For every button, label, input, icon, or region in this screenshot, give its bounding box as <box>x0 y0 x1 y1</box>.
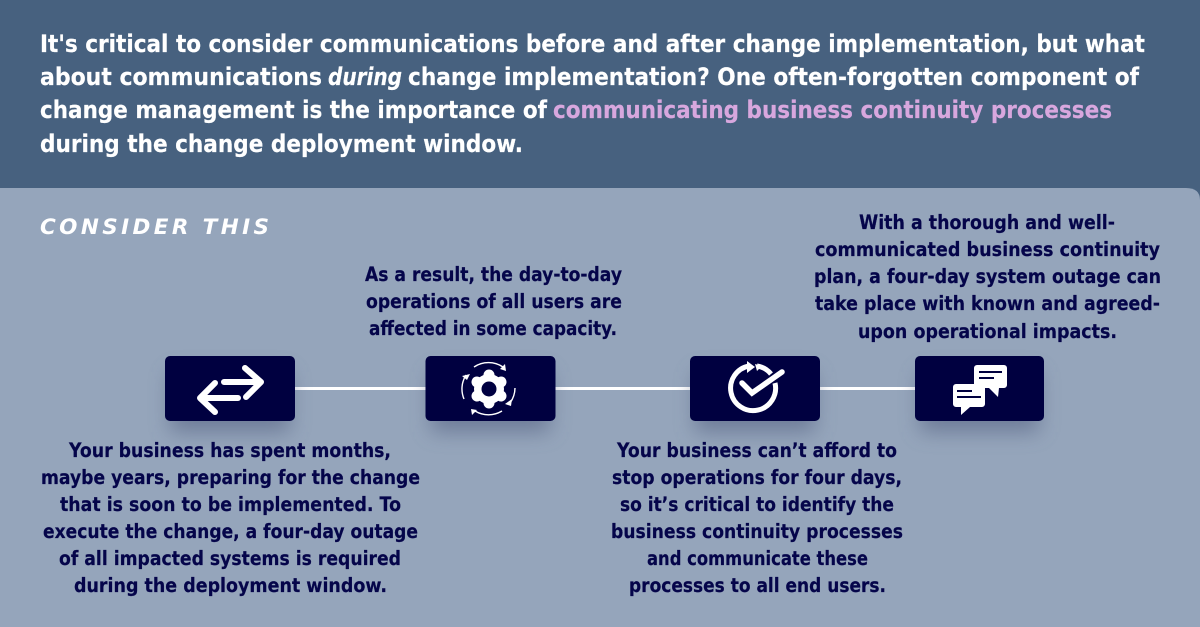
step 3 icon box: check cycle <box>690 356 820 432</box>
step 1 text <box>41 439 420 597</box>
intro paragraph: change management is the importance of <box>40 96 547 124</box>
step 1 text: execute the change, a four-day outage <box>43 520 418 543</box>
step 3 text: and communicate these <box>647 547 868 570</box>
step 1 text: of all impacted systems is required <box>59 547 401 570</box>
step 2 text: operations of all users are <box>366 290 622 313</box>
step 4 text: plan, a four-day system outage can <box>814 265 1161 288</box>
step 3 text: business continuity processes <box>611 520 903 543</box>
timeline connector <box>290 387 920 390</box>
step 1 text: during the deployment window. <box>74 574 387 597</box>
step 2 text: affected in some capacity. <box>369 317 617 340</box>
step 2 icon box: gear cycle <box>426 356 556 432</box>
step 4 text: upon operational impacts. <box>858 320 1117 343</box>
panel: consider this <box>0 188 1200 627</box>
step 1 text: Your business has spent months, <box>68 439 391 462</box>
step 4 icon box: chat bubbles <box>915 356 1044 432</box>
step 3 text <box>611 439 903 597</box>
step 3 text: so it’s critical to identify the <box>620 493 894 516</box>
intro paragraph: during <box>328 63 402 91</box>
step 4 text: With a thorough and well- <box>859 211 1115 234</box>
step 2 text: As a result, the day-to-day <box>365 263 622 286</box>
intro paragraph <box>40 30 1145 158</box>
step 4 text <box>814 211 1161 343</box>
step 1 icon box: arrows <box>165 356 295 432</box>
intro paragraph: communicating business continuity processes <box>553 96 1112 124</box>
intro paragraph: change implementation? One often-forgotten component of <box>408 63 1139 91</box>
step 3 text: processes to all end users. <box>629 574 886 597</box>
step 4 text: take place with known and agreed- <box>815 292 1160 315</box>
intro paragraph: during the change deployment window. <box>40 130 523 158</box>
step 1 text: that is soon to be implemented. To <box>60 493 401 516</box>
step 2 text <box>365 263 622 340</box>
intro paragraph: about communications <box>40 63 322 91</box>
step 3 text: Your business can’t afford to <box>616 439 897 462</box>
step 1 text: maybe years, preparing for the change <box>41 466 420 489</box>
step 4 text: communicated business continuity <box>815 238 1160 261</box>
heading: consider this: CONSIDER THIS <box>40 215 269 240</box>
step 3 text: stop operations for four days, <box>612 466 902 489</box>
